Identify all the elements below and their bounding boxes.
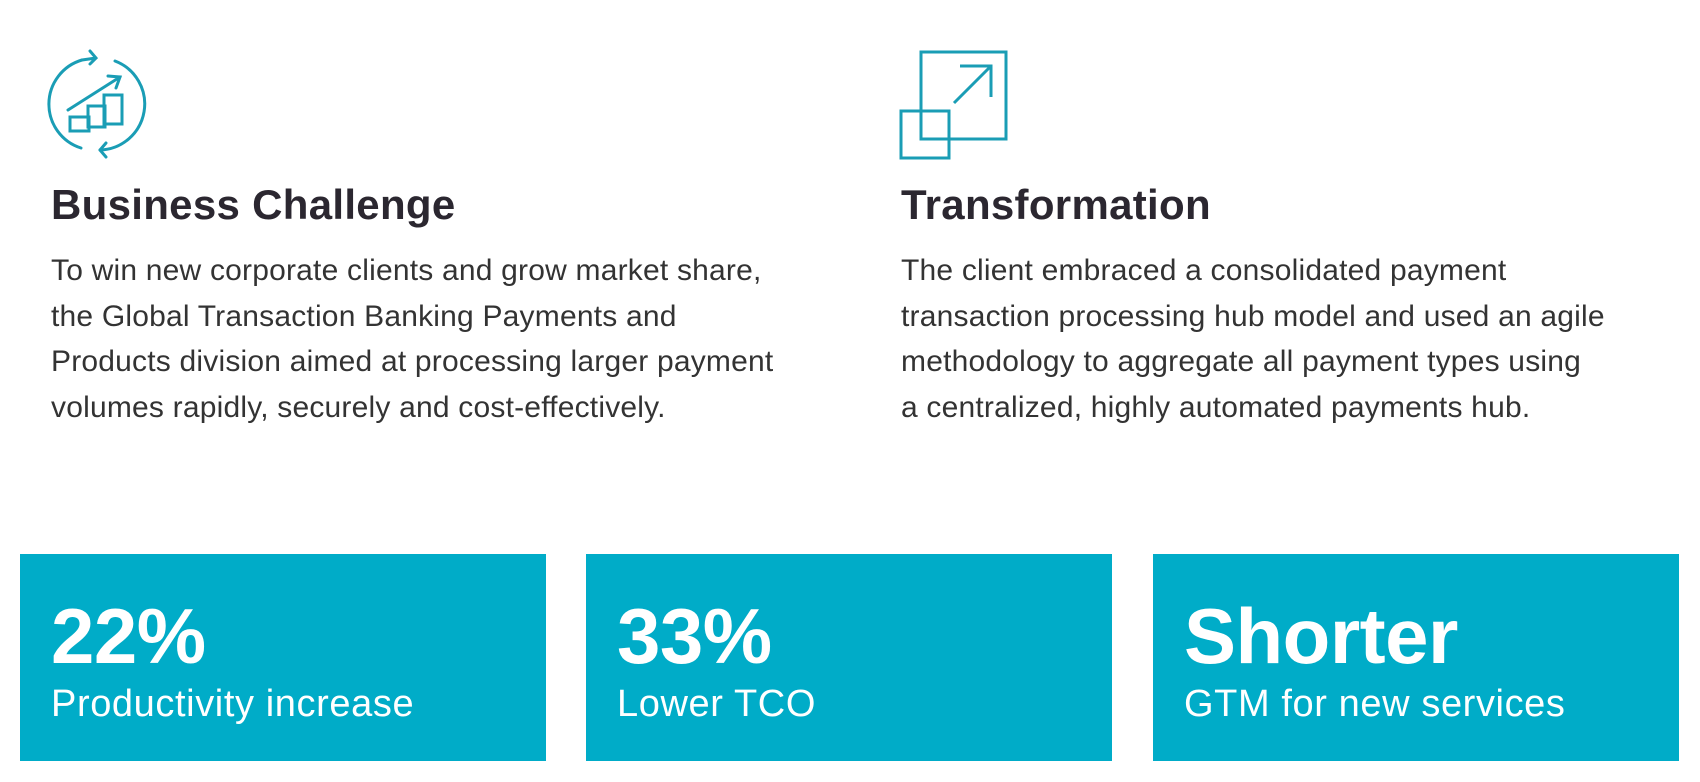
text: transformation: transaction processing hub model and used an agile xyxy=(901,300,1605,332)
text: business challenge: Products division aimed at processing larger payment xyxy=(51,345,773,378)
icon: transformation squares xyxy=(900,50,1008,160)
icon: growth cycle xyxy=(47,49,146,159)
text: transformation: The client embraced a consolidated payment xyxy=(901,254,1506,287)
stat box: 22%: 22% xyxy=(51,592,206,680)
text: business challenge: To win new corporate clients and grow market share, xyxy=(51,254,762,287)
text: transformation xyxy=(901,254,1605,424)
stat box: 33% xyxy=(586,554,1112,761)
text: transformation: methodology to aggregate all payment types using xyxy=(901,345,1581,378)
stat box: 22% xyxy=(20,554,546,761)
text: business challenge xyxy=(51,254,773,424)
stat box: Shorter xyxy=(1153,554,1679,761)
stat box: 33%: Lower TCO xyxy=(617,683,816,725)
stat box: Shorter: GTM for new services xyxy=(1184,683,1566,725)
stat box: 33%: 33% xyxy=(617,592,772,680)
heading: Transformation: Transformation xyxy=(901,181,1211,228)
heading: Business Challenge: Business Challenge xyxy=(51,181,456,228)
stat box: Shorter: Shorter xyxy=(1184,592,1458,680)
text: business challenge: volumes rapidly, securely and cost-effectively. xyxy=(51,390,666,424)
text: business challenge: the Global Transaction Banking Payments and xyxy=(51,300,677,332)
stat box: 22%: Productivity increase xyxy=(51,683,414,725)
text: transformation: a centralized, highly automated payments hub. xyxy=(901,390,1530,424)
